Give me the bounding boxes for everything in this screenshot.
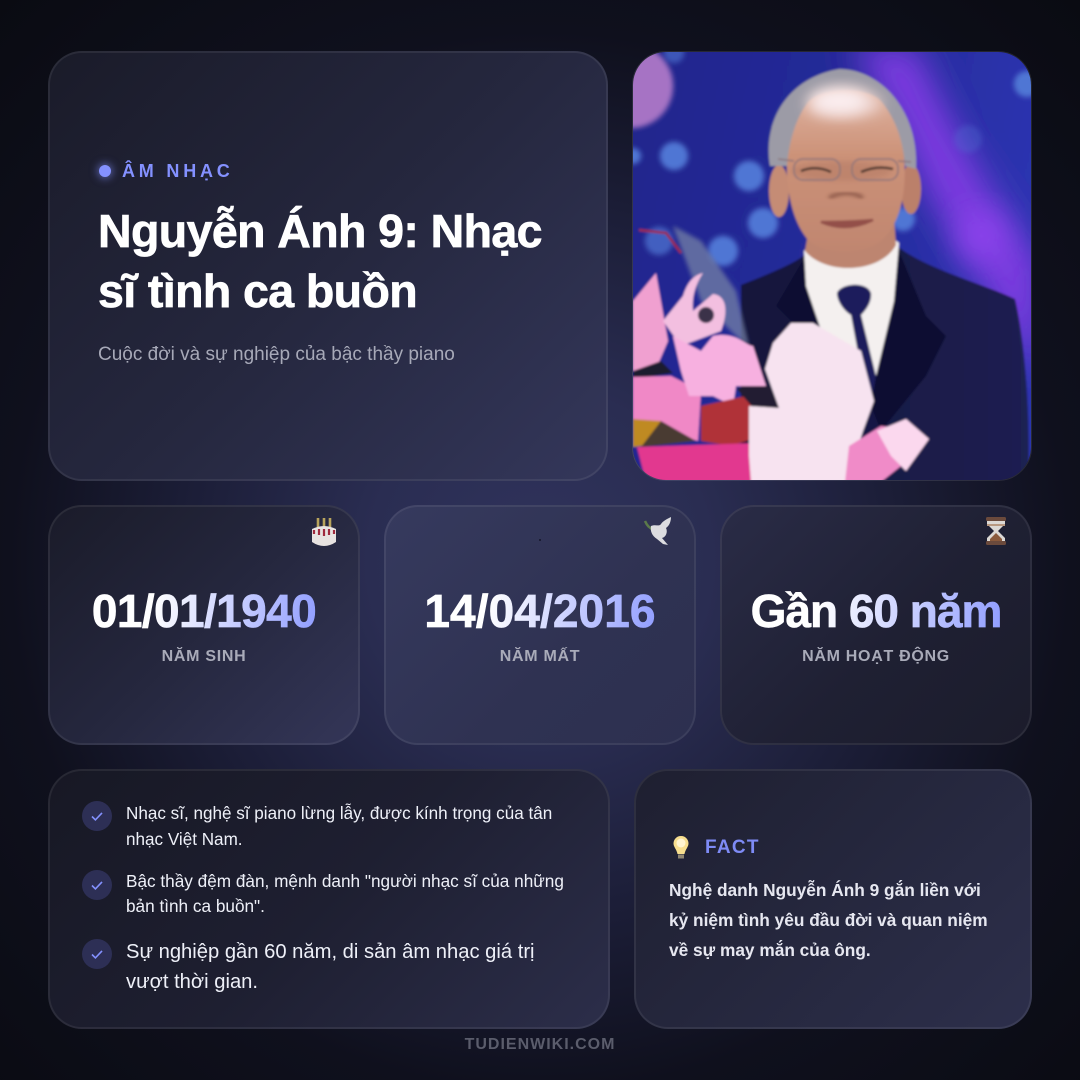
wrapping paper and ribbon [749, 323, 929, 482]
title [98, 205, 542, 317]
panel: key points [48, 769, 610, 1029]
point text [126, 941, 535, 993]
fact text: Nghệ danh Nguyễn Ánh 9 gắn liền với [669, 880, 981, 900]
flower bouquet [633, 226, 783, 482]
panel: death date stat [384, 505, 696, 745]
point text [126, 804, 552, 849]
title: sĩ tình ca buồn [98, 265, 417, 317]
point 2 [82, 870, 564, 916]
photo: portrait with flowers [632, 51, 1032, 481]
check icon [82, 870, 112, 900]
panel: fact [634, 769, 1032, 1029]
point text: Nhạc sĩ, nghệ sĩ piano lừng lẫy, được kính trọng của tân [126, 804, 552, 823]
label: NĂM HOẠT ĐỘNG [802, 648, 950, 665]
subtitle: Cuộc đời và sự nghiệp của bậc thầy piano [98, 344, 455, 365]
label: NĂM MẤT [500, 648, 580, 665]
fact heading: FACT [705, 837, 760, 858]
point text: Sự nghiệp gần 60 năm, di sản âm nhạc giá trị [126, 941, 535, 963]
footer source: TUDIENWIKI.COM [465, 1036, 615, 1053]
point text: vượt thời gian. [126, 971, 258, 993]
tie [837, 285, 876, 393]
point text: Bậc thầy đệm đàn, mệnh danh "người nhạc sĩ của những [126, 871, 564, 891]
title: Nguyễn Ánh 9: Nhạc [98, 205, 542, 257]
category tag [92, 158, 234, 184]
fact text: kỷ niệm tình yêu đầu đời và quan niệm [669, 910, 988, 930]
suit jacket [741, 246, 1029, 482]
point 1 [82, 801, 552, 849]
fact text: về sự may mắn của ông. [669, 940, 871, 960]
fact text [669, 880, 988, 960]
label: NĂM SINH [162, 648, 246, 665]
icon: hourglass [986, 517, 1006, 545]
check icon [82, 801, 112, 831]
point text: nhạc Việt Nam. [126, 830, 243, 849]
stage background [589, 43, 1041, 484]
white shirt [804, 233, 899, 376]
value: 14/04/2016 [424, 585, 656, 637]
neck and head [769, 69, 921, 268]
dark speck [539, 539, 541, 541]
icon: birthday cake [312, 518, 336, 546]
point text: bản tình ca buồn". [126, 896, 265, 916]
icon: light bulb [674, 836, 688, 858]
value: Gần 60 năm [751, 585, 1001, 637]
value: 01/01/1940 [92, 585, 316, 637]
panel: title card [48, 51, 608, 481]
point 3 [82, 939, 535, 993]
panel: birth date stat [48, 505, 360, 745]
point text [126, 871, 564, 916]
panel: active years stat [720, 505, 1032, 745]
category dot [99, 165, 111, 177]
category label: ÂM NHẠC [122, 161, 234, 181]
check icon [82, 939, 112, 969]
icon: dove [644, 517, 671, 545]
